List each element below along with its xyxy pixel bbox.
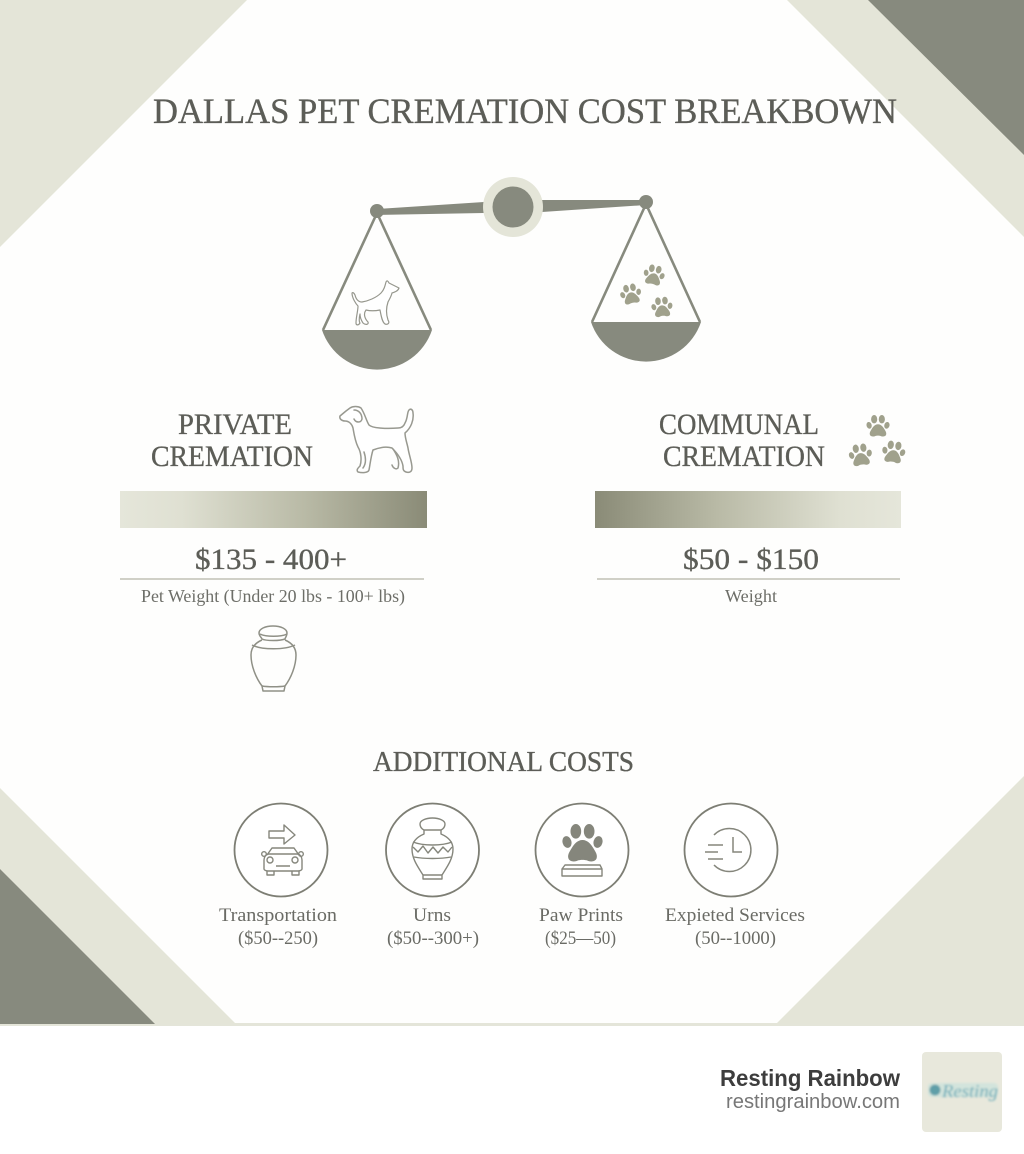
bar: communal cost [595, 491, 901, 528]
heading: private cremation: CREMATION [151, 440, 313, 473]
heading: communal cremation: COMMUNAL [659, 408, 819, 441]
scale pivot [483, 177, 543, 237]
label: transportation: Transportation [219, 905, 338, 926]
panel: communal cremation [595, 408, 907, 606]
note: weight: Weight [725, 586, 777, 606]
bar: private cost [120, 491, 427, 528]
icon: paw print on base [561, 824, 604, 876]
note: pet weight: Pet Weight (Under 20 lbs - 100+ lbs) [141, 586, 405, 607]
icon: decorated urn [412, 818, 453, 879]
price: communal: $50 - $150 [683, 543, 819, 576]
price: private: $135 - 400+ [195, 543, 347, 576]
label: paw prints: Paw Prints [539, 905, 623, 926]
left pan [322, 204, 432, 370]
label: urns: ($50--300+) [387, 928, 479, 949]
balance scale [322, 177, 701, 370]
label: transportation [219, 905, 338, 949]
heading: private cremation: PRIVATE [178, 408, 292, 441]
label: paw prints [539, 905, 623, 949]
corner: top right [787, 0, 1024, 237]
icon: arrow and car [262, 825, 303, 875]
scale beam [377, 200, 646, 215]
right pan [591, 195, 701, 362]
label: urns [387, 905, 479, 949]
heading: additional costs: ADDITIONAL COSTS [373, 747, 634, 778]
label: paw prints: ($25—50) [545, 928, 616, 949]
icon: fast clock [705, 828, 751, 871]
icon: small dog [352, 281, 399, 325]
item: transportation [219, 804, 338, 949]
icon: paws [847, 415, 907, 467]
label: expedited services: Expieted Services [665, 905, 805, 926]
corner: bottom right [776, 776, 1024, 1024]
logo [922, 1052, 1002, 1132]
item: expedited services [665, 804, 805, 949]
corner: bottom left [0, 788, 236, 1024]
icon: dog [340, 406, 413, 473]
label: expedited services: (50--1000) [695, 928, 776, 949]
heading: communal cremation: CREMATION [663, 440, 825, 473]
icon: urn [251, 626, 296, 691]
item: urns [386, 804, 479, 949]
title: DALLAS PET CREMATION COST BREAKBOWN [153, 91, 897, 131]
panel: private cremation [120, 406, 427, 691]
heading: communal cremation [659, 408, 825, 473]
label: transportation: ($50--250) [238, 928, 318, 949]
footer: brand [720, 1052, 1002, 1132]
brand url: restingrainbow.com [726, 1091, 900, 1113]
brand name: Resting Rainbow [720, 1065, 900, 1091]
label: expedited services [665, 905, 805, 949]
icon: paws on pan [618, 263, 674, 318]
heading: private cremation [151, 408, 313, 473]
logo: Resting [941, 1081, 998, 1101]
label: urns: Urns [413, 905, 451, 926]
corner: top left [0, 0, 247, 247]
item: paw prints [536, 804, 628, 949]
